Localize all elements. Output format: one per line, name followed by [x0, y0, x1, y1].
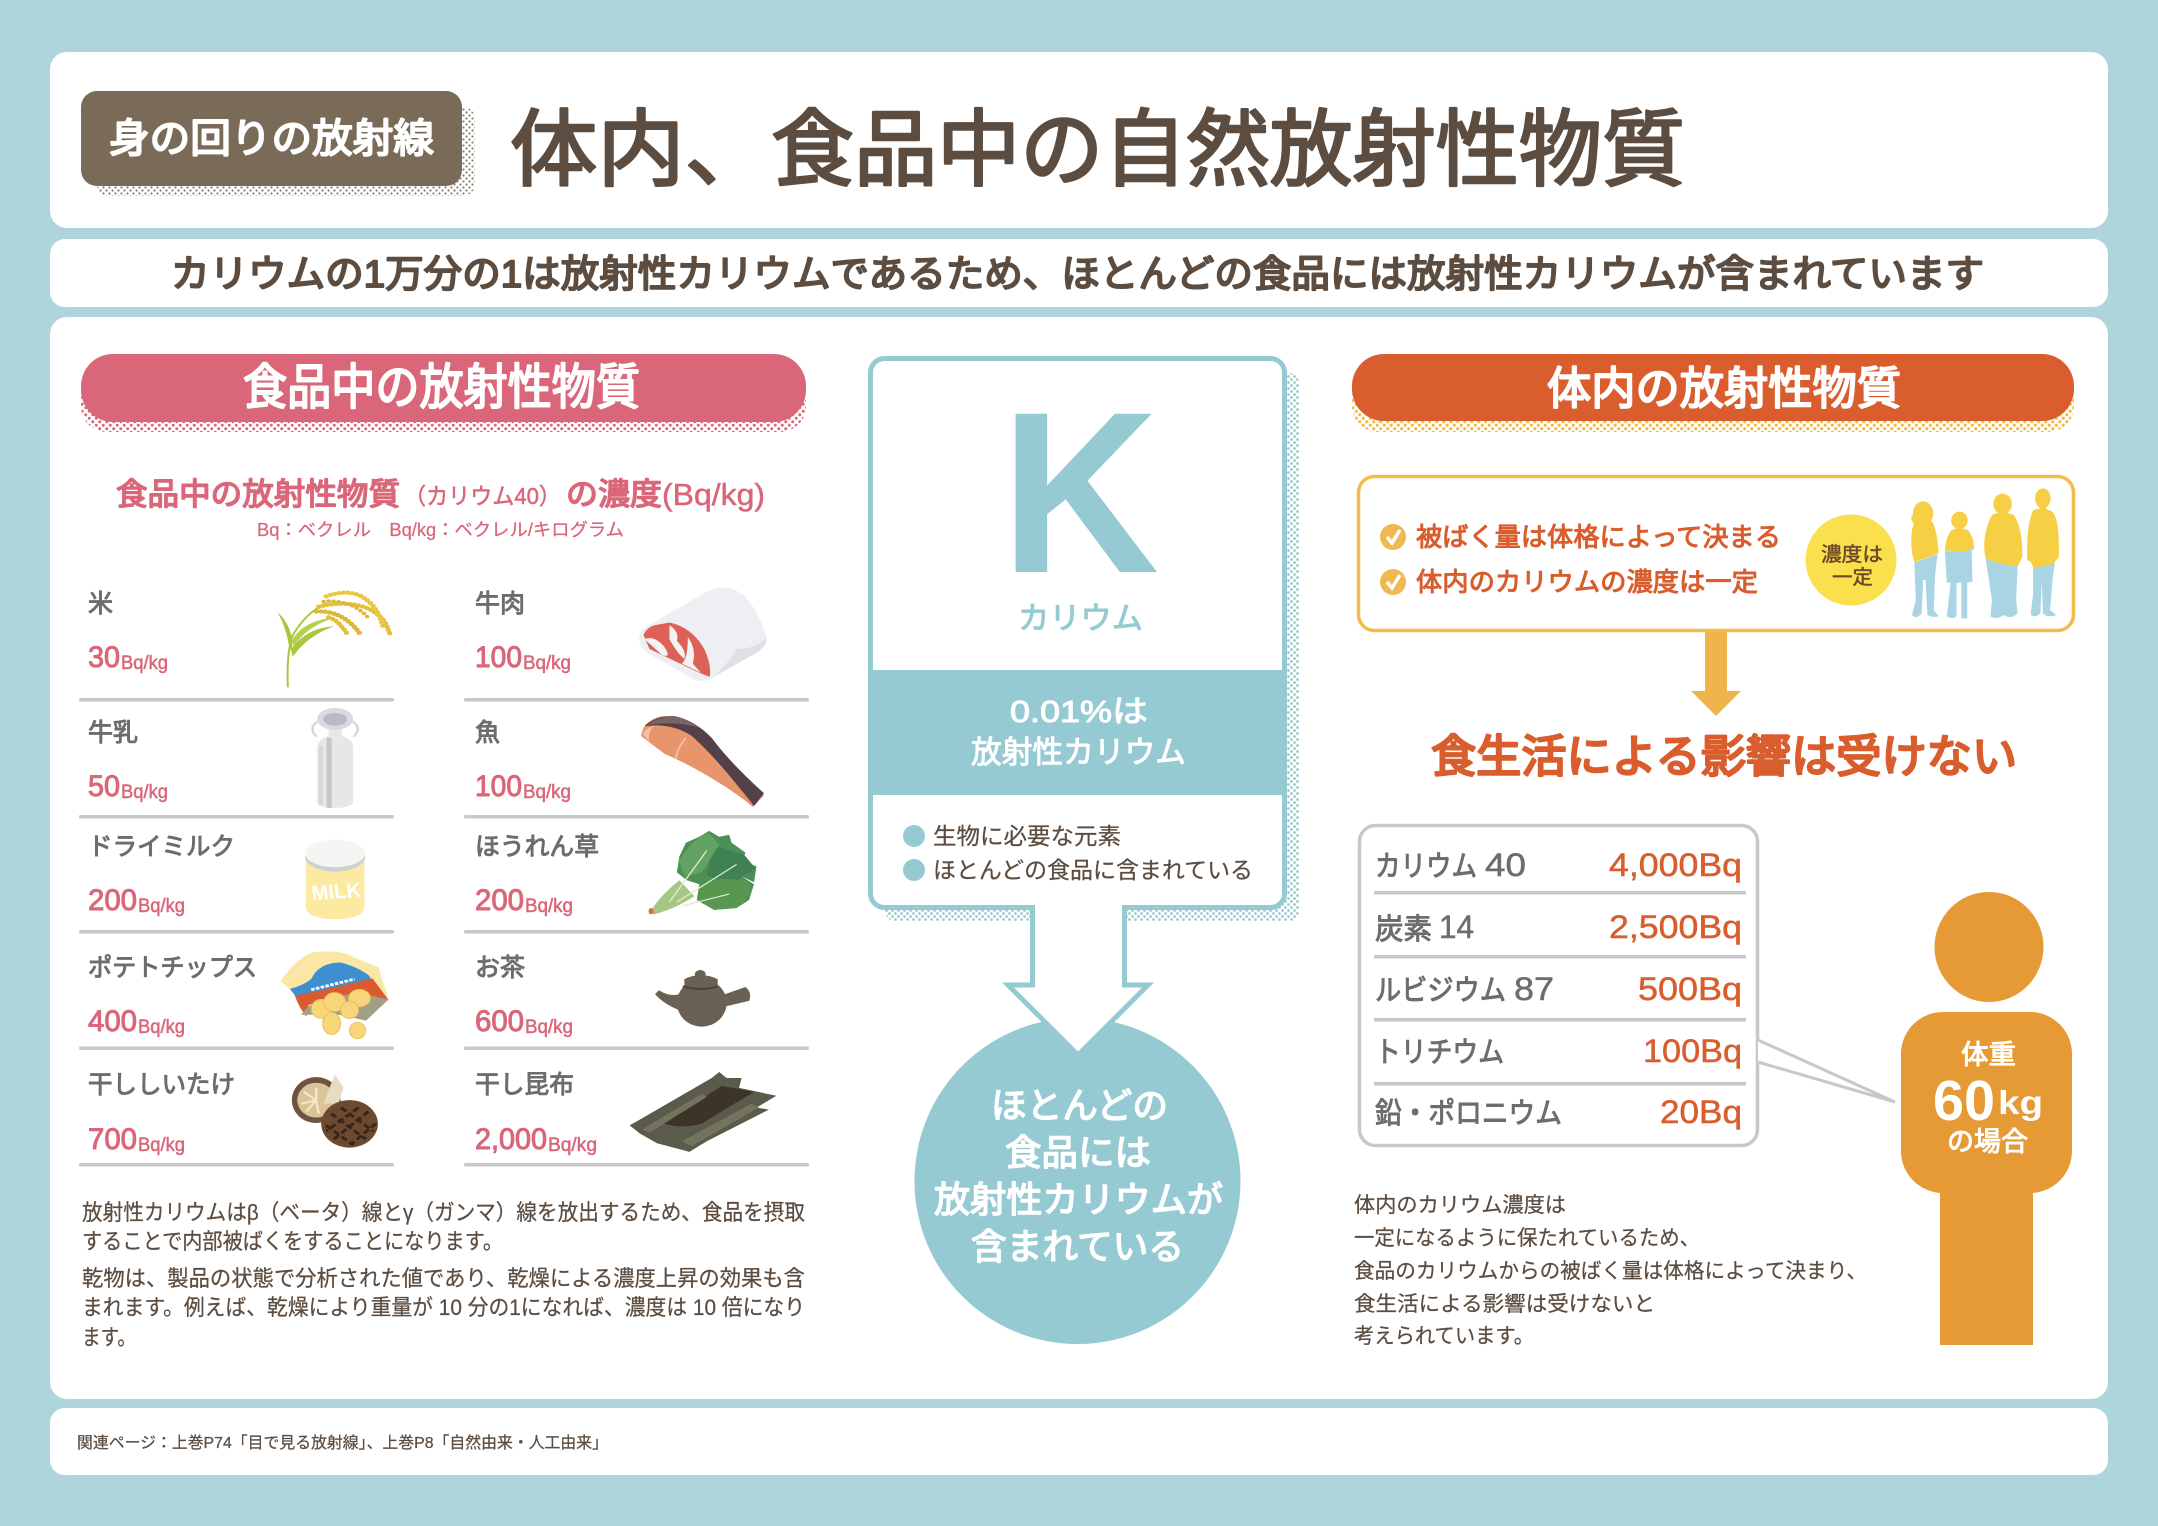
- related pages note: 関連ページ：上巻P74「目で見る放射線」、上巻P8「自然由来・人工由来」: [77, 1434, 608, 1452]
- item: ドライミルク: Bq/kg: [138, 896, 185, 917]
- item: 干し昆布: Bq/kg: [548, 1135, 597, 1156]
- item: 牛肉: 牛肉: [475, 590, 525, 618]
- callout pointer: [1758, 1040, 1895, 1102]
- bullet list: 生物に必要な元素: [933, 823, 1121, 849]
- check icon: [1380, 569, 1406, 595]
- icon: spinach: [649, 831, 756, 914]
- label: weight: kg: [1998, 1084, 2043, 1121]
- row: 炭素 14: 炭素: [1375, 913, 1432, 946]
- icon: person 60kg: [1901, 892, 2072, 1345]
- row: ルビジウム 87: 500Bq: [1638, 971, 1742, 1007]
- text block: food note: まれます。例えば、乾燥により重量が 10 分の1になれば、濃度は 10 倍になり: [82, 1295, 805, 1320]
- row: カリウム 40: カリウム: [1375, 851, 1477, 883]
- row: ルビジウム 87: 87: [1514, 971, 1554, 1007]
- icon: dried shiitake: [292, 1075, 378, 1148]
- icon: dried kombu: [630, 1072, 776, 1152]
- table: body radionuclides: [1360, 826, 1758, 1146]
- divider: [464, 815, 809, 818]
- heading: 体内の放射性物質: [1352, 354, 2074, 432]
- divider: [464, 1163, 809, 1166]
- divider: [464, 698, 809, 702]
- item: 牛乳: 50: [88, 770, 120, 803]
- item: ほうれん草: 200: [475, 884, 524, 917]
- callout circle: 食品には: [1005, 1132, 1151, 1173]
- item: お茶: [475, 954, 750, 1038]
- item: 米: [88, 590, 391, 687]
- item: 干ししいたけ: Bq/kg: [138, 1135, 185, 1156]
- label: weight: [1933, 1040, 2043, 1157]
- icon: dry milk can: [305, 840, 365, 919]
- item: 干し昆布: 2,000: [475, 1123, 547, 1156]
- row: カリウム 40: 40: [1485, 847, 1526, 883]
- panel: subtitle: [50, 239, 2108, 307]
- divider: [79, 698, 394, 702]
- item: 牛肉: Bq/kg: [523, 653, 571, 674]
- text block: food note: することで内部被ばくをすることになります。: [82, 1229, 503, 1254]
- chart title: concentration of radioactive material in food: （カリウム40）: [404, 483, 561, 509]
- item: お茶: お茶: [475, 954, 525, 982]
- item: 干ししいたけ: 700: [88, 1123, 137, 1156]
- big K symbol: K: [1001, 364, 1159, 621]
- panel: footer: [50, 1408, 2108, 1475]
- subtitle text: カリウムの1万分の1は放射性カリウムであるため、ほとんどの食品には放射性カリウムが含まれています: [171, 254, 1984, 296]
- chart title: concentration of radioactive material in food: (Bq/kg): [662, 477, 765, 512]
- text block: body note: 食生活による影響は受けないと: [1354, 1293, 1655, 1316]
- text block: food note: [82, 1200, 805, 1350]
- item: 牛肉: [475, 588, 767, 681]
- item: 干し昆布: [475, 1071, 776, 1156]
- item: ドライミルク: 200: [88, 884, 137, 917]
- item: 魚: Bq/kg: [523, 782, 571, 803]
- heading: 食品中の放射性物質: [81, 354, 806, 432]
- panel: header: [50, 52, 2108, 228]
- divider: [79, 1163, 394, 1166]
- chart title: concentration of radioactive material in food: の濃度: [566, 477, 662, 512]
- arrow: card to circle: [1008, 905, 1148, 1055]
- callout circle: ほとんどの: [991, 1085, 1168, 1126]
- text block: body note: 一定になるように保たれているため、: [1354, 1227, 1700, 1250]
- row: 炭素 14: [1375, 909, 1742, 946]
- icon: dry milk can: MILK: [310, 878, 362, 905]
- divider: [79, 1046, 394, 1050]
- text block: body note: [1354, 1194, 1867, 1348]
- row: ルビジウム 87: [1375, 971, 1742, 1007]
- item: お茶: Bq/kg: [525, 1017, 573, 1038]
- chart title: concentration of radioactive material in food: 食品中の放射性物質: [116, 477, 400, 512]
- unit note: Bq：ベクレル Bq/kg：ベクレル/キログラム: [257, 520, 624, 540]
- badge: 身の回りの放射線: [81, 91, 475, 196]
- row: 炭素 14: 14: [1439, 909, 1474, 945]
- item: 牛乳: [88, 708, 358, 808]
- conclusion headline: 食生活による影響は受けない: [1431, 731, 2017, 782]
- arrow: facts to conclusion: [1691, 632, 1741, 716]
- row: カリウム 40: 4,000Bq: [1609, 847, 1742, 883]
- badge: 濃度は一定: 一定: [1832, 566, 1873, 589]
- row: 鉛・ポロニウム: 鉛・ポロニウム: [1375, 1097, 1562, 1130]
- item: 干ししいたけ: [88, 1071, 378, 1156]
- row: トリチウム: トリチウム: [1375, 1037, 1504, 1069]
- label: weight: 体重: [1961, 1040, 2016, 1070]
- panel: exposure facts: [1358, 476, 2074, 630]
- item: 魚: 100: [475, 770, 522, 803]
- item: 干ししいたけ: 干ししいたけ: [88, 1071, 235, 1099]
- icon: milk can: [312, 708, 358, 808]
- item: ドライミルク: ドライミルク: [88, 833, 235, 861]
- badge: 身の回りの放射線: 身の回りの放射線: [109, 117, 434, 161]
- item: 米: 30: [88, 641, 120, 674]
- panel: potassium card: [868, 358, 1299, 921]
- band: 0.01%: 0.01%は: [1010, 694, 1148, 729]
- icon: rice: [277, 593, 391, 687]
- title: 食品中の自然放射性物質: [771, 103, 1685, 197]
- band: 0.01%: 放射性カリウム: [971, 735, 1186, 770]
- fact 1: 被ばく量は体格によって決まる: [1416, 522, 1781, 552]
- chart title: concentration of radioactive material in food: [116, 477, 765, 512]
- item: 干し昆布: 干し昆布: [475, 1071, 574, 1099]
- check icon: [1380, 524, 1406, 550]
- item: 魚: 魚: [475, 719, 500, 747]
- item: 牛乳: 牛乳: [88, 719, 138, 747]
- icon: potato chips: [280, 952, 388, 1039]
- row: ルビジウム 87: ルビジウム: [1375, 975, 1506, 1007]
- item: ポテトチップス: ポテトチップス: [88, 954, 257, 982]
- item: 牛肉: 100: [475, 641, 522, 674]
- icon: teapot: [655, 970, 750, 1027]
- row: 鉛・ポロニウム: [1375, 1094, 1742, 1130]
- divider: [464, 1046, 809, 1050]
- text block: food note: ます。: [82, 1325, 136, 1350]
- item: ほうれん草: [475, 831, 756, 917]
- callout circle: [914, 1018, 1240, 1344]
- text block: food note: 乾物は、製品の状態で分析された値であり、乾燥による濃度上昇の効果も含: [82, 1266, 805, 1291]
- heading: 食品中の放射性物質: 食品中の放射性物質: [243, 361, 640, 415]
- bullet list: [903, 823, 1253, 883]
- item: 米: Bq/kg: [121, 653, 168, 674]
- callout circle: 放射性カリウムが: [934, 1179, 1223, 1220]
- callout circle: 含まれている: [971, 1226, 1184, 1267]
- fact 2: 体内のカリウムの濃度は一定: [1416, 567, 1758, 597]
- heading: 体内の放射性物質: 体内の放射性物質: [1547, 363, 1901, 414]
- divider: [79, 930, 394, 934]
- badge: 濃度は一定: 濃度は: [1821, 543, 1883, 566]
- divider: [464, 930, 809, 934]
- label: weight: 60: [1933, 1069, 1995, 1133]
- item: お茶: 600: [475, 1005, 524, 1038]
- bullet list: ほとんどの食品に含まれている: [933, 857, 1253, 883]
- item: 牛乳: Bq/kg: [121, 782, 168, 803]
- item: 米: 米: [88, 590, 113, 618]
- panel: main content: [50, 317, 2108, 1399]
- text block: food note: 放射性カリウムはβ（ベータ）線とγ（ガンマ）線を放出するため、食品を摂取: [82, 1200, 805, 1225]
- text block: body note: 体内のカリウム濃度は: [1354, 1194, 1566, 1217]
- label: カリウム: カリウム: [1018, 601, 1143, 636]
- title: 体内、: [510, 103, 772, 197]
- badge: 濃度は一定: [1806, 514, 1896, 606]
- item: ほうれん草: Bq/kg: [525, 896, 573, 917]
- label: weight: の場合: [1947, 1127, 2028, 1157]
- item: ポテトチップス: Bq/kg: [138, 1017, 185, 1038]
- band: 0.01%: [868, 670, 1287, 795]
- item: ポテトチップス: [88, 952, 388, 1039]
- row: 鉛・ポロニウム: 20Bq: [1660, 1094, 1742, 1130]
- text block: body note: 考えられています。: [1354, 1325, 1534, 1348]
- text block: body note: 食品のカリウムからの被ばく量は体格によって決まり、: [1354, 1260, 1867, 1283]
- row: トリチウム: 100Bq: [1643, 1033, 1742, 1069]
- item: ポテトチップス: 400: [88, 1005, 137, 1038]
- row: カリウム 40: [1375, 847, 1742, 883]
- food table: [79, 588, 809, 1166]
- divider: [79, 815, 394, 818]
- row: トリチウム: [1375, 1033, 1742, 1069]
- icon: salmon: [641, 716, 764, 807]
- row: 炭素 14: 2,500Bq: [1609, 909, 1742, 945]
- item: 魚: [475, 716, 764, 807]
- icon: family silhouettes: [1911, 488, 2059, 618]
- icon: beef: [639, 588, 767, 681]
- item: ドライミルク: [88, 833, 365, 919]
- item: ほうれん草: ほうれん草: [475, 833, 599, 861]
